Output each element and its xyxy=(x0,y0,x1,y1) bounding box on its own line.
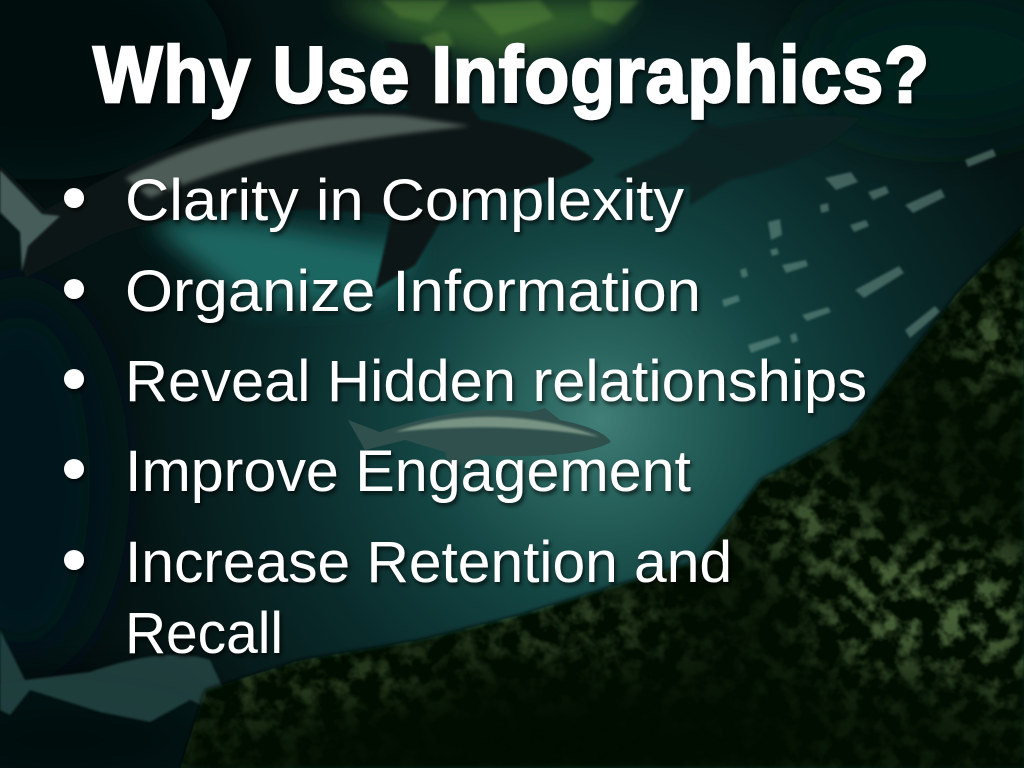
highlight on large shark xyxy=(125,115,470,198)
bullet: clarity: Clarity in Complexity xyxy=(125,168,684,233)
bullet: increase: Increase Retention and xyxy=(125,530,732,595)
title: Why Use Infographics? xyxy=(93,30,930,119)
bullet: increase: Recall xyxy=(125,601,283,666)
light ripples on the water xyxy=(722,149,996,353)
bullet: increase xyxy=(64,530,732,666)
bullet: improve: Improve Engagement xyxy=(125,439,691,504)
icon: middle shark xyxy=(348,408,611,470)
bullet list xyxy=(64,168,867,666)
highlight on shark tail xyxy=(0,170,60,272)
icon: upper right shark xyxy=(615,116,860,205)
icon: large shark xyxy=(0,42,594,290)
bullet: reveal: Reveal Hidden relationships xyxy=(125,349,867,414)
green canopy at top xyxy=(380,0,640,50)
rocks with green algae xyxy=(180,225,1024,768)
bullet: organize: Organize Information xyxy=(125,259,701,324)
icon: lower left shark xyxy=(0,630,240,725)
